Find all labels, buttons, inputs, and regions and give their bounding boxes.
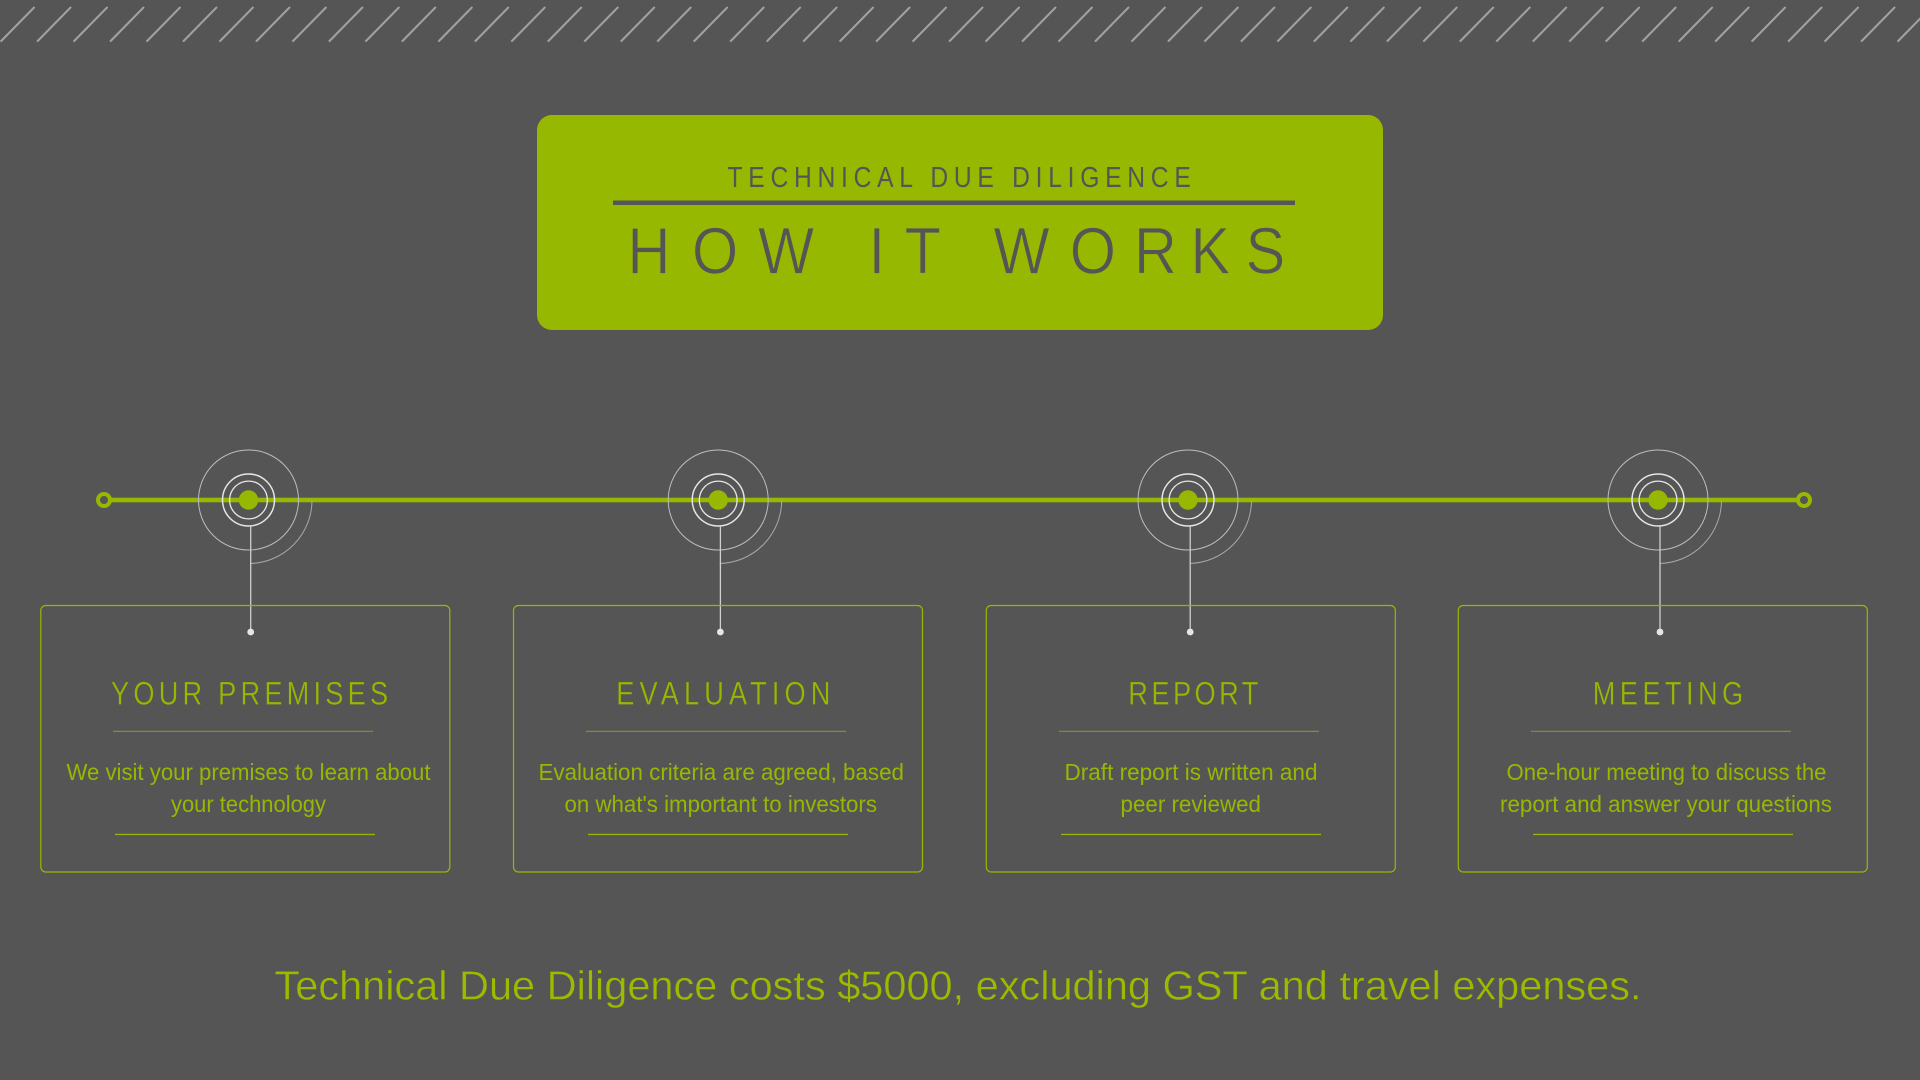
- timeline: [98, 450, 1810, 635]
- description: evaluation: on what's important to investors: [564, 791, 877, 817]
- description: meeting: report and answer your questions: [1500, 791, 1832, 817]
- milestone 3: [1138, 450, 1252, 635]
- timeline start marker: [98, 494, 110, 506]
- timeline end marker: [1798, 494, 1810, 506]
- heading: meeting: MEETING: [1593, 676, 1743, 712]
- description: report: Draft report is written and: [1064, 759, 1318, 785]
- description: evaluation: Evaluation criteria are agreed, based: [538, 759, 904, 785]
- panel: evaluation: [514, 606, 922, 872]
- pricing note: Technical Due Diligence costs $5000, excluding GST and travel expenses.: [274, 962, 1642, 1008]
- heading: report: REPORT: [1128, 676, 1258, 712]
- description: report: peer reviewed: [1120, 791, 1261, 817]
- panel: your premises: [41, 606, 450, 872]
- main title: HOW IT WORKS: [627, 215, 1285, 288]
- panel: report: [986, 606, 1395, 872]
- heading: your premises: YOUR PREMISES: [111, 676, 388, 712]
- milestone 4: [1608, 450, 1722, 635]
- title rule: [613, 200, 1295, 205]
- milestone 2: [668, 450, 782, 635]
- timeline line: [104, 498, 1804, 502]
- milestone 1: [198, 450, 312, 635]
- subtitle: TECHNICAL DUE DILIGENCE: [728, 161, 1191, 193]
- panel: meeting: [1458, 606, 1867, 872]
- heading: evaluation: EVALUATION: [616, 676, 830, 712]
- description: your premises: We visit your premises to learn about: [66, 759, 431, 785]
- title banner: [537, 115, 1383, 330]
- description: your premises: your technology: [171, 791, 326, 817]
- description: meeting: One-hour meeting to discuss the: [1506, 759, 1826, 785]
